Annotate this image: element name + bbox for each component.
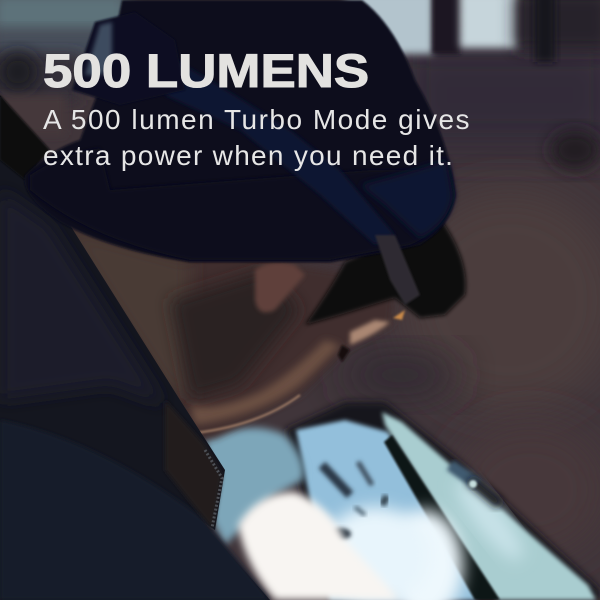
map with blue-lit pages <box>285 402 600 600</box>
headlamp glow <box>393 310 405 320</box>
heading: 500 LUMENS <box>43 44 369 97</box>
sleeve <box>205 428 304 545</box>
ear and face <box>45 205 395 440</box>
description text: extra power when you need it. <box>43 140 454 171</box>
jacket <box>0 95 270 600</box>
description text: A 500 lumen Turbo Mode gives <box>43 104 471 135</box>
strap end near temple <box>375 235 420 305</box>
hair <box>305 218 466 325</box>
description text <box>43 104 471 171</box>
headlamp strap <box>165 60 395 245</box>
headlamp body <box>72 12 185 105</box>
beanie hat <box>24 0 455 305</box>
glowing hand <box>238 492 400 600</box>
